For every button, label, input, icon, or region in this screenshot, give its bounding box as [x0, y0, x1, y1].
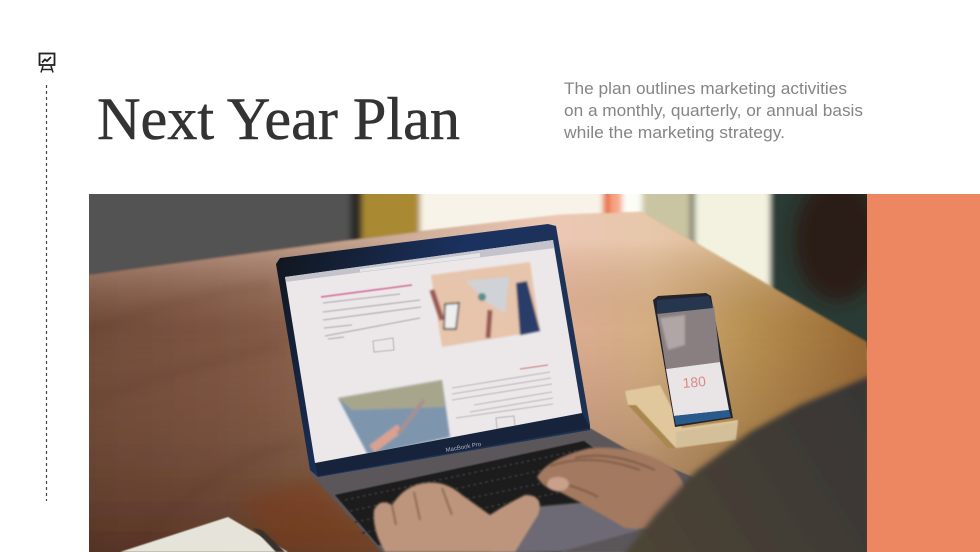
- website image: marketing chart: [431, 262, 540, 347]
- laptop screen: MacBook Pro: [445, 442, 482, 454]
- panel: orange side block: [867, 194, 980, 552]
- phone: 180: [682, 373, 707, 391]
- description text: on a monthly, quarterly, or annual basis: [564, 102, 863, 120]
- laptop base: [309, 428, 700, 552]
- sleeve: [620, 376, 870, 552]
- trackpad: [514, 502, 639, 552]
- dotted timeline line: [46, 85, 48, 501]
- hand: right: [537, 448, 686, 529]
- notebook: [120, 517, 288, 552]
- browser bar: [285, 236, 555, 282]
- keyboard: [334, 440, 594, 552]
- hand: left: [374, 482, 540, 552]
- description text: [563, 80, 863, 142]
- description text: The plan outlines marketing activities: [564, 80, 847, 98]
- table surface: [80, 212, 880, 552]
- photo background: room: [89, 194, 867, 353]
- laptop screen: [276, 224, 590, 477]
- website image: hand with tablet: [338, 380, 450, 455]
- description text: while the marketing strategy.: [563, 124, 785, 142]
- title: Next Year Plan: [97, 86, 460, 152]
- website text blocks: [321, 285, 553, 429]
- phone stand: [625, 385, 738, 448]
- phone: [653, 293, 733, 427]
- photo: laptop and phone on table: [70, 178, 882, 552]
- icon: presentation board: [40, 54, 54, 72]
